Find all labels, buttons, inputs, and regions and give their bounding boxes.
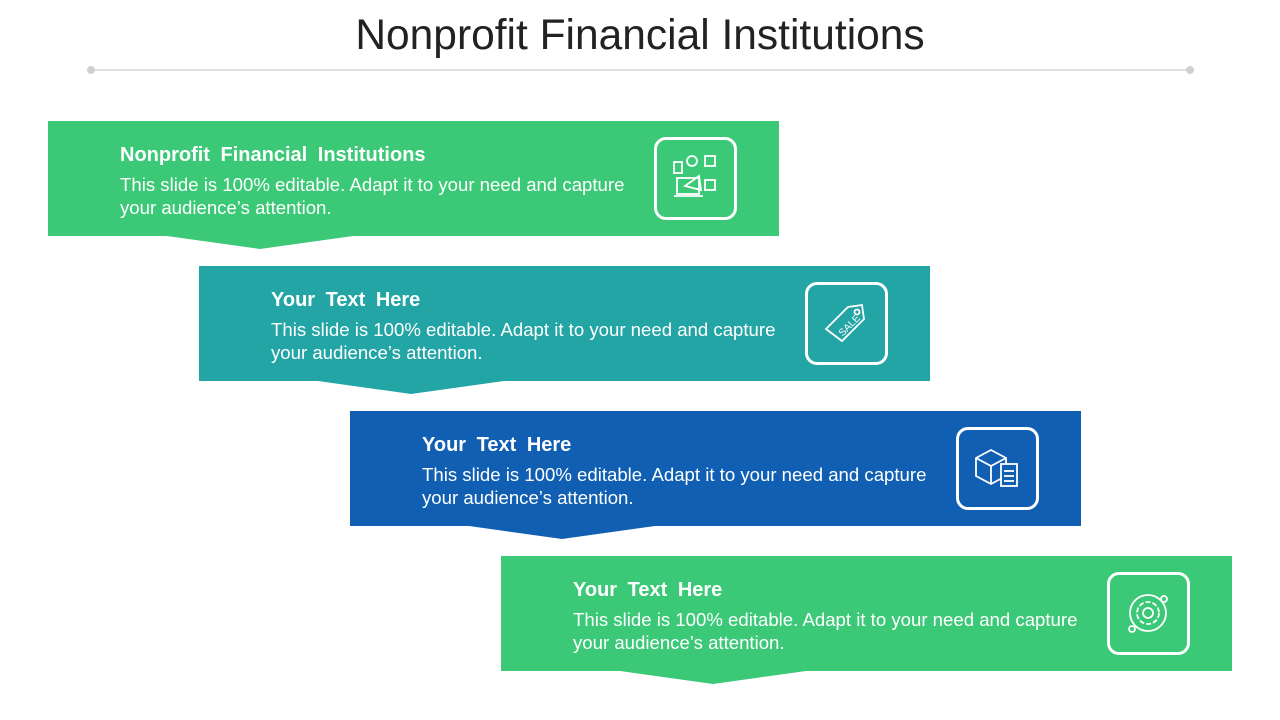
pointer 3 xyxy=(469,526,655,539)
text 1: This slide is 100% editable. Adapt it to your need and capture your audience’s attention. xyxy=(120,174,624,218)
pointer 2 xyxy=(318,381,504,394)
panel 2 xyxy=(199,266,930,381)
icon: megaphone xyxy=(654,137,737,220)
icon: sale tag: SALE xyxy=(837,313,863,339)
text 3: This slide is 100% editable. Adapt it to your need and capture your audience’s attention. xyxy=(422,464,926,508)
icon: gear xyxy=(1107,572,1190,655)
text 2: This slide is 100% editable. Adapt it to your need and capture your audience’s attention. xyxy=(271,319,775,363)
pointer 4 xyxy=(620,671,806,684)
icon: sale tag xyxy=(805,282,888,365)
panel 1 xyxy=(48,121,779,236)
panel 3 xyxy=(350,411,1081,526)
heading 4: Your Text Here xyxy=(573,579,722,601)
text 4: This slide is 100% editable. Adapt it to your need and capture your audience’s attention. xyxy=(573,609,1077,653)
heading 1: Nonprofit Financial Institutions xyxy=(120,144,426,166)
panel 4 xyxy=(501,556,1232,671)
heading 3: Your Text Here xyxy=(422,434,571,456)
divider xyxy=(87,66,1194,74)
heading 2: Your Text Here xyxy=(271,289,420,311)
pointer 1 xyxy=(167,236,353,249)
icon: box checklist xyxy=(956,427,1039,510)
title: Nonprofit Financial Institutions xyxy=(355,12,925,59)
